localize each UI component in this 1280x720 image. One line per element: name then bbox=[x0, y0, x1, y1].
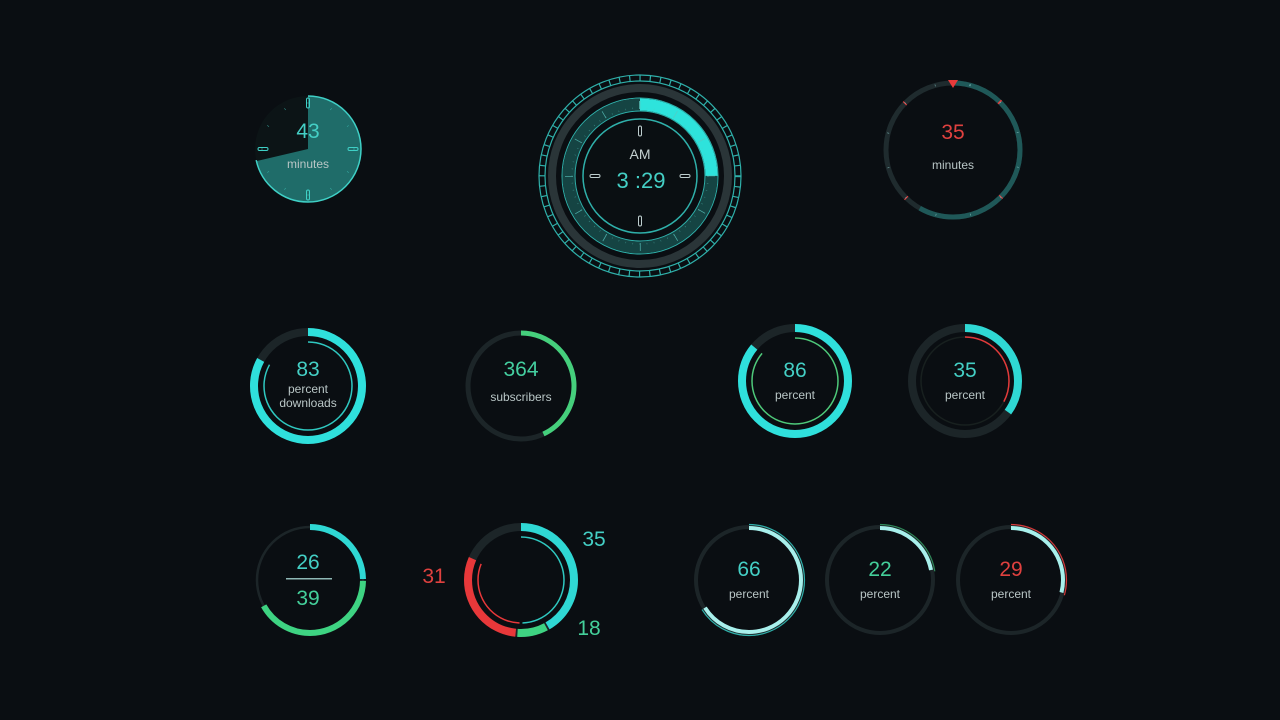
gauge: clock 3:29 AM: 3 :29 bbox=[617, 168, 665, 193]
gauge: 86 percent bbox=[742, 328, 848, 434]
gauge: 22 percent: percent bbox=[860, 587, 901, 601]
gauge: 86 percent: percent bbox=[775, 388, 816, 402]
gauge: 86 percent: 86 bbox=[783, 359, 807, 382]
gauge: 364 subscribers bbox=[468, 333, 574, 439]
gauge: clock 3:29 AM bbox=[539, 75, 741, 277]
gauge: 29 percent bbox=[956, 524, 1066, 636]
gauge: 26 / 39: 26 bbox=[296, 551, 320, 574]
gauge: 35 minutes: 35 bbox=[941, 121, 965, 144]
gauge: 35 / 18 / 31 breakdown: 18 bbox=[577, 617, 601, 640]
gauge: 66 percent bbox=[694, 524, 804, 636]
gauge: 364 subscribers: 364 bbox=[503, 358, 539, 381]
gauge: 26 / 39 bbox=[257, 527, 363, 633]
gauge: 35 / 18 / 31 breakdown: 31 bbox=[422, 565, 446, 588]
gauge: 35 percent: 35 bbox=[953, 359, 977, 382]
gauge: 43 minutes: 43 bbox=[296, 120, 320, 143]
gauge: 35 minutes bbox=[858, 55, 1048, 245]
gauge: 43 minutes: minutes bbox=[287, 157, 329, 171]
gauge: 35 percent: percent bbox=[945, 388, 986, 402]
gauge: 66 percent: percent bbox=[729, 587, 770, 601]
gauge: clock 3:29 AM: AM bbox=[630, 146, 650, 162]
gauge: 26 / 39: 39 bbox=[296, 587, 320, 610]
gauge: 83 percent downloads: downloads bbox=[279, 396, 337, 410]
gauge: 35 / 18 / 31 breakdown: 35 bbox=[582, 528, 606, 551]
gauge: 83 percent downloads: percent bbox=[288, 382, 329, 396]
gauge: 29 percent: 29 bbox=[999, 558, 1023, 581]
gauge: 83 percent downloads: 83 bbox=[296, 358, 320, 381]
gauge: 22 percent bbox=[824, 524, 936, 636]
gauge: 83 percent downloads bbox=[254, 332, 362, 440]
gauge: 43 minutes bbox=[255, 96, 361, 202]
gauge: 29 percent: percent bbox=[991, 587, 1032, 601]
gauge: 22 percent: 22 bbox=[868, 558, 892, 581]
gauge: 35 minutes: minutes bbox=[932, 158, 974, 172]
gauge: 364 subscribers: subscribers bbox=[490, 390, 552, 404]
gauge: 35 / 18 / 31 breakdown bbox=[422, 527, 606, 640]
gauge: 66 percent: 66 bbox=[737, 558, 761, 581]
gauge: 35 percent bbox=[912, 328, 1018, 434]
